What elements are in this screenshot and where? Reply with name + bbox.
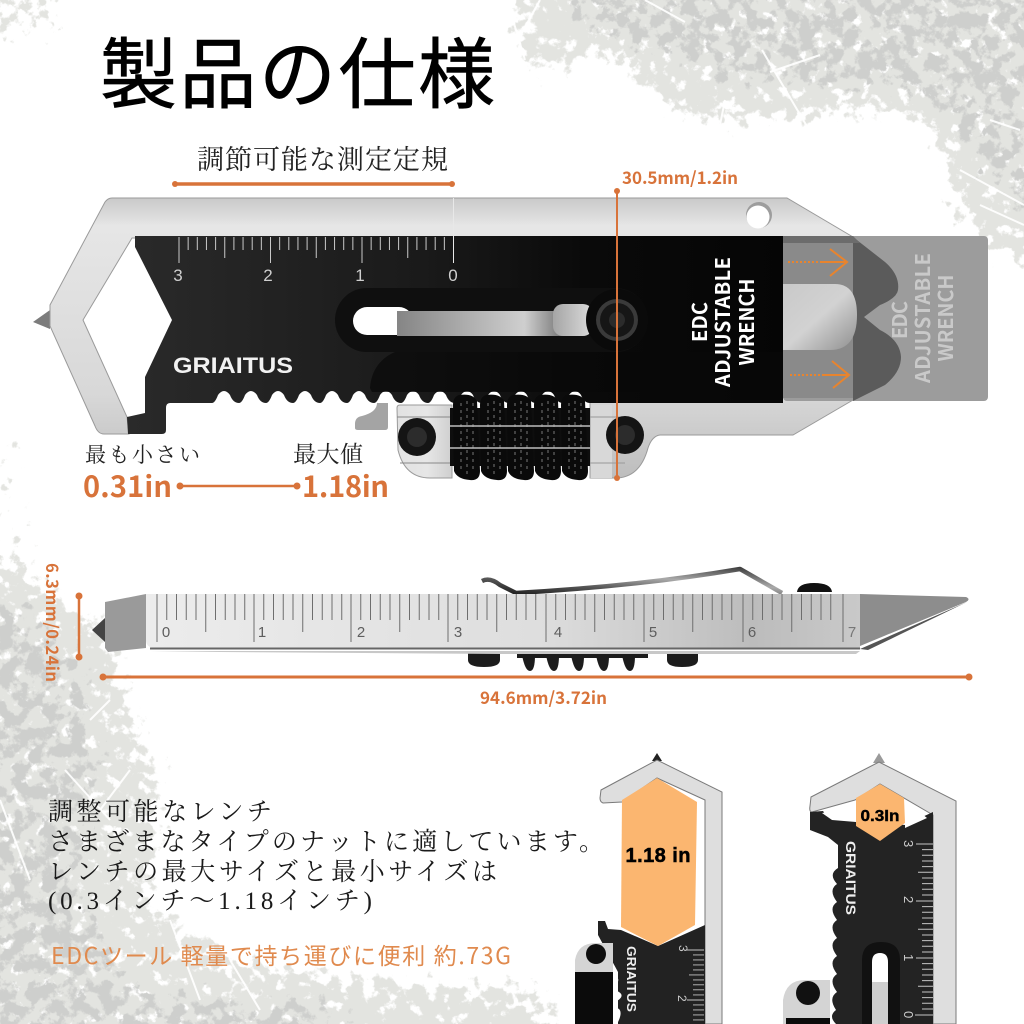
callout: minimum size: 0.31in <box>83 464 172 506</box>
slot recess <box>335 288 648 352</box>
blade <box>860 594 968 646</box>
ghost label: WRENCH <box>930 274 959 362</box>
dimension: length 94.6mm <box>100 674 972 709</box>
wrench detail: 0.3 in jaw <box>783 753 956 1024</box>
ruler numbers: 2 <box>263 266 273 285</box>
description text: (0.3インチ〜1.18インチ) <box>48 888 372 915</box>
callout: maximum size <box>293 442 389 506</box>
wrench label: ADJUSTABLE <box>707 257 736 388</box>
ruler numbers: 1 <box>355 266 365 285</box>
description text: レンチの最大サイズと最小サイズは <box>48 858 497 886</box>
side ruler numbers: 0 <box>162 624 170 641</box>
slot opening <box>353 304 593 336</box>
grey ghost hook <box>355 403 388 430</box>
ruler face <box>146 594 860 648</box>
logo: GRIAITUS <box>843 841 859 915</box>
callout: minimum size: 最も小さい <box>85 443 200 467</box>
weight note: EDCツール 軽量で持ち運びに便利 約.73G <box>51 937 511 971</box>
ghost label <box>884 253 959 384</box>
side ruler numbers: 5 <box>649 624 657 641</box>
white gaps of jaw <box>822 806 856 822</box>
wrench detail: 0.3 in jaw: 3 <box>901 840 916 847</box>
spike tip <box>33 310 50 329</box>
spike <box>92 618 105 642</box>
hexagon 1.18 <box>621 778 697 946</box>
side ruler numbers: 6 <box>748 624 756 641</box>
knob <box>575 943 622 1024</box>
wrench detail: 0.3 in jaw: 2 <box>901 896 916 903</box>
dimension: thickness 6.3mm: 6.3mm/0.24in <box>41 563 65 682</box>
wrench detail: 1.18 in jaw: 2 <box>675 995 689 1002</box>
side ruler numbers: 1 <box>258 624 266 641</box>
wrench detail: 1.18 in jaw <box>575 753 722 1024</box>
knob <box>783 980 830 1024</box>
value 1.18 in: 1.18 in <box>626 845 690 867</box>
ruler numbers: 3 <box>173 266 183 285</box>
arrow: lower <box>790 361 849 388</box>
value 0.3in: 0.3In <box>860 808 900 825</box>
callout: maximum size: 最大値 <box>293 442 363 467</box>
side ruler numbers: 7 <box>848 624 856 641</box>
silver frame <box>600 760 722 1024</box>
black body with serrated edge <box>127 236 783 434</box>
wrench front view <box>33 198 988 480</box>
title: 製品の仕様 <box>100 33 495 119</box>
dimension: width 30.5mm <box>614 164 738 481</box>
slider screw <box>586 289 648 351</box>
slot <box>862 942 900 1024</box>
logo GRIAITUS: GRIAITUS <box>173 353 293 378</box>
ruler numbers: 0 <box>448 266 458 285</box>
side ruler numbers: 3 <box>454 624 462 641</box>
arrow: upper <box>788 249 847 276</box>
dimension: width 30.5mm: 30.5mm/1.2in <box>622 164 738 189</box>
description text: 調整可能なレンチ <box>48 798 272 826</box>
ghost label: ADJUSTABLE <box>907 253 936 384</box>
lower jaw shade <box>370 352 783 403</box>
side ruler numbers <box>162 624 856 641</box>
side ruler ticks <box>157 594 843 642</box>
wrench label: EDC <box>684 302 713 342</box>
silver frame <box>810 762 956 1024</box>
wrench detail: 0.3 in jaw: 1 <box>901 954 916 961</box>
lower screws and thread <box>468 652 698 671</box>
black body <box>810 811 933 1024</box>
dimension line: ruler length <box>172 181 455 187</box>
adjustment knob <box>397 395 644 480</box>
ruler <box>915 844 933 1015</box>
side ruler numbers: 2 <box>357 624 365 641</box>
ruler <box>687 950 704 1024</box>
black body <box>598 921 705 1024</box>
left end facet <box>105 594 146 652</box>
range line <box>176 482 300 490</box>
wrench detail: 1.18 in jaw: 3 <box>676 945 690 952</box>
wrench detail: 0.3 in jaw: 0 <box>901 1011 916 1018</box>
description text: さまざまなタイプのナットに適しています。 <box>48 828 604 856</box>
clip screw <box>797 583 832 592</box>
wrench label: WRENCH <box>731 278 760 366</box>
description text <box>48 798 604 915</box>
heading: adjustable measuring ruler: 調節可能な測定定規 <box>197 145 448 175</box>
ruler ticks <box>179 198 454 263</box>
lanyard hole <box>746 202 772 228</box>
dimension: length 94.6mm: 94.6mm/3.72in <box>480 684 607 709</box>
dimension: thickness 6.3mm <box>41 563 82 682</box>
callout: maximum size: 1.18in <box>302 464 389 506</box>
pocket clip <box>482 569 782 593</box>
logo: GRIAITUS <box>624 946 639 1012</box>
hexagon 0.3 <box>856 784 905 841</box>
side ruler numbers: 4 <box>554 624 562 641</box>
extended jaw ghost <box>783 236 988 401</box>
wrench label <box>684 257 760 388</box>
ruler numbers <box>173 266 458 285</box>
callout: minimum size <box>83 443 200 506</box>
ghost label: EDC <box>884 301 913 339</box>
wrench side view <box>92 569 968 671</box>
silver frame <box>50 198 853 478</box>
